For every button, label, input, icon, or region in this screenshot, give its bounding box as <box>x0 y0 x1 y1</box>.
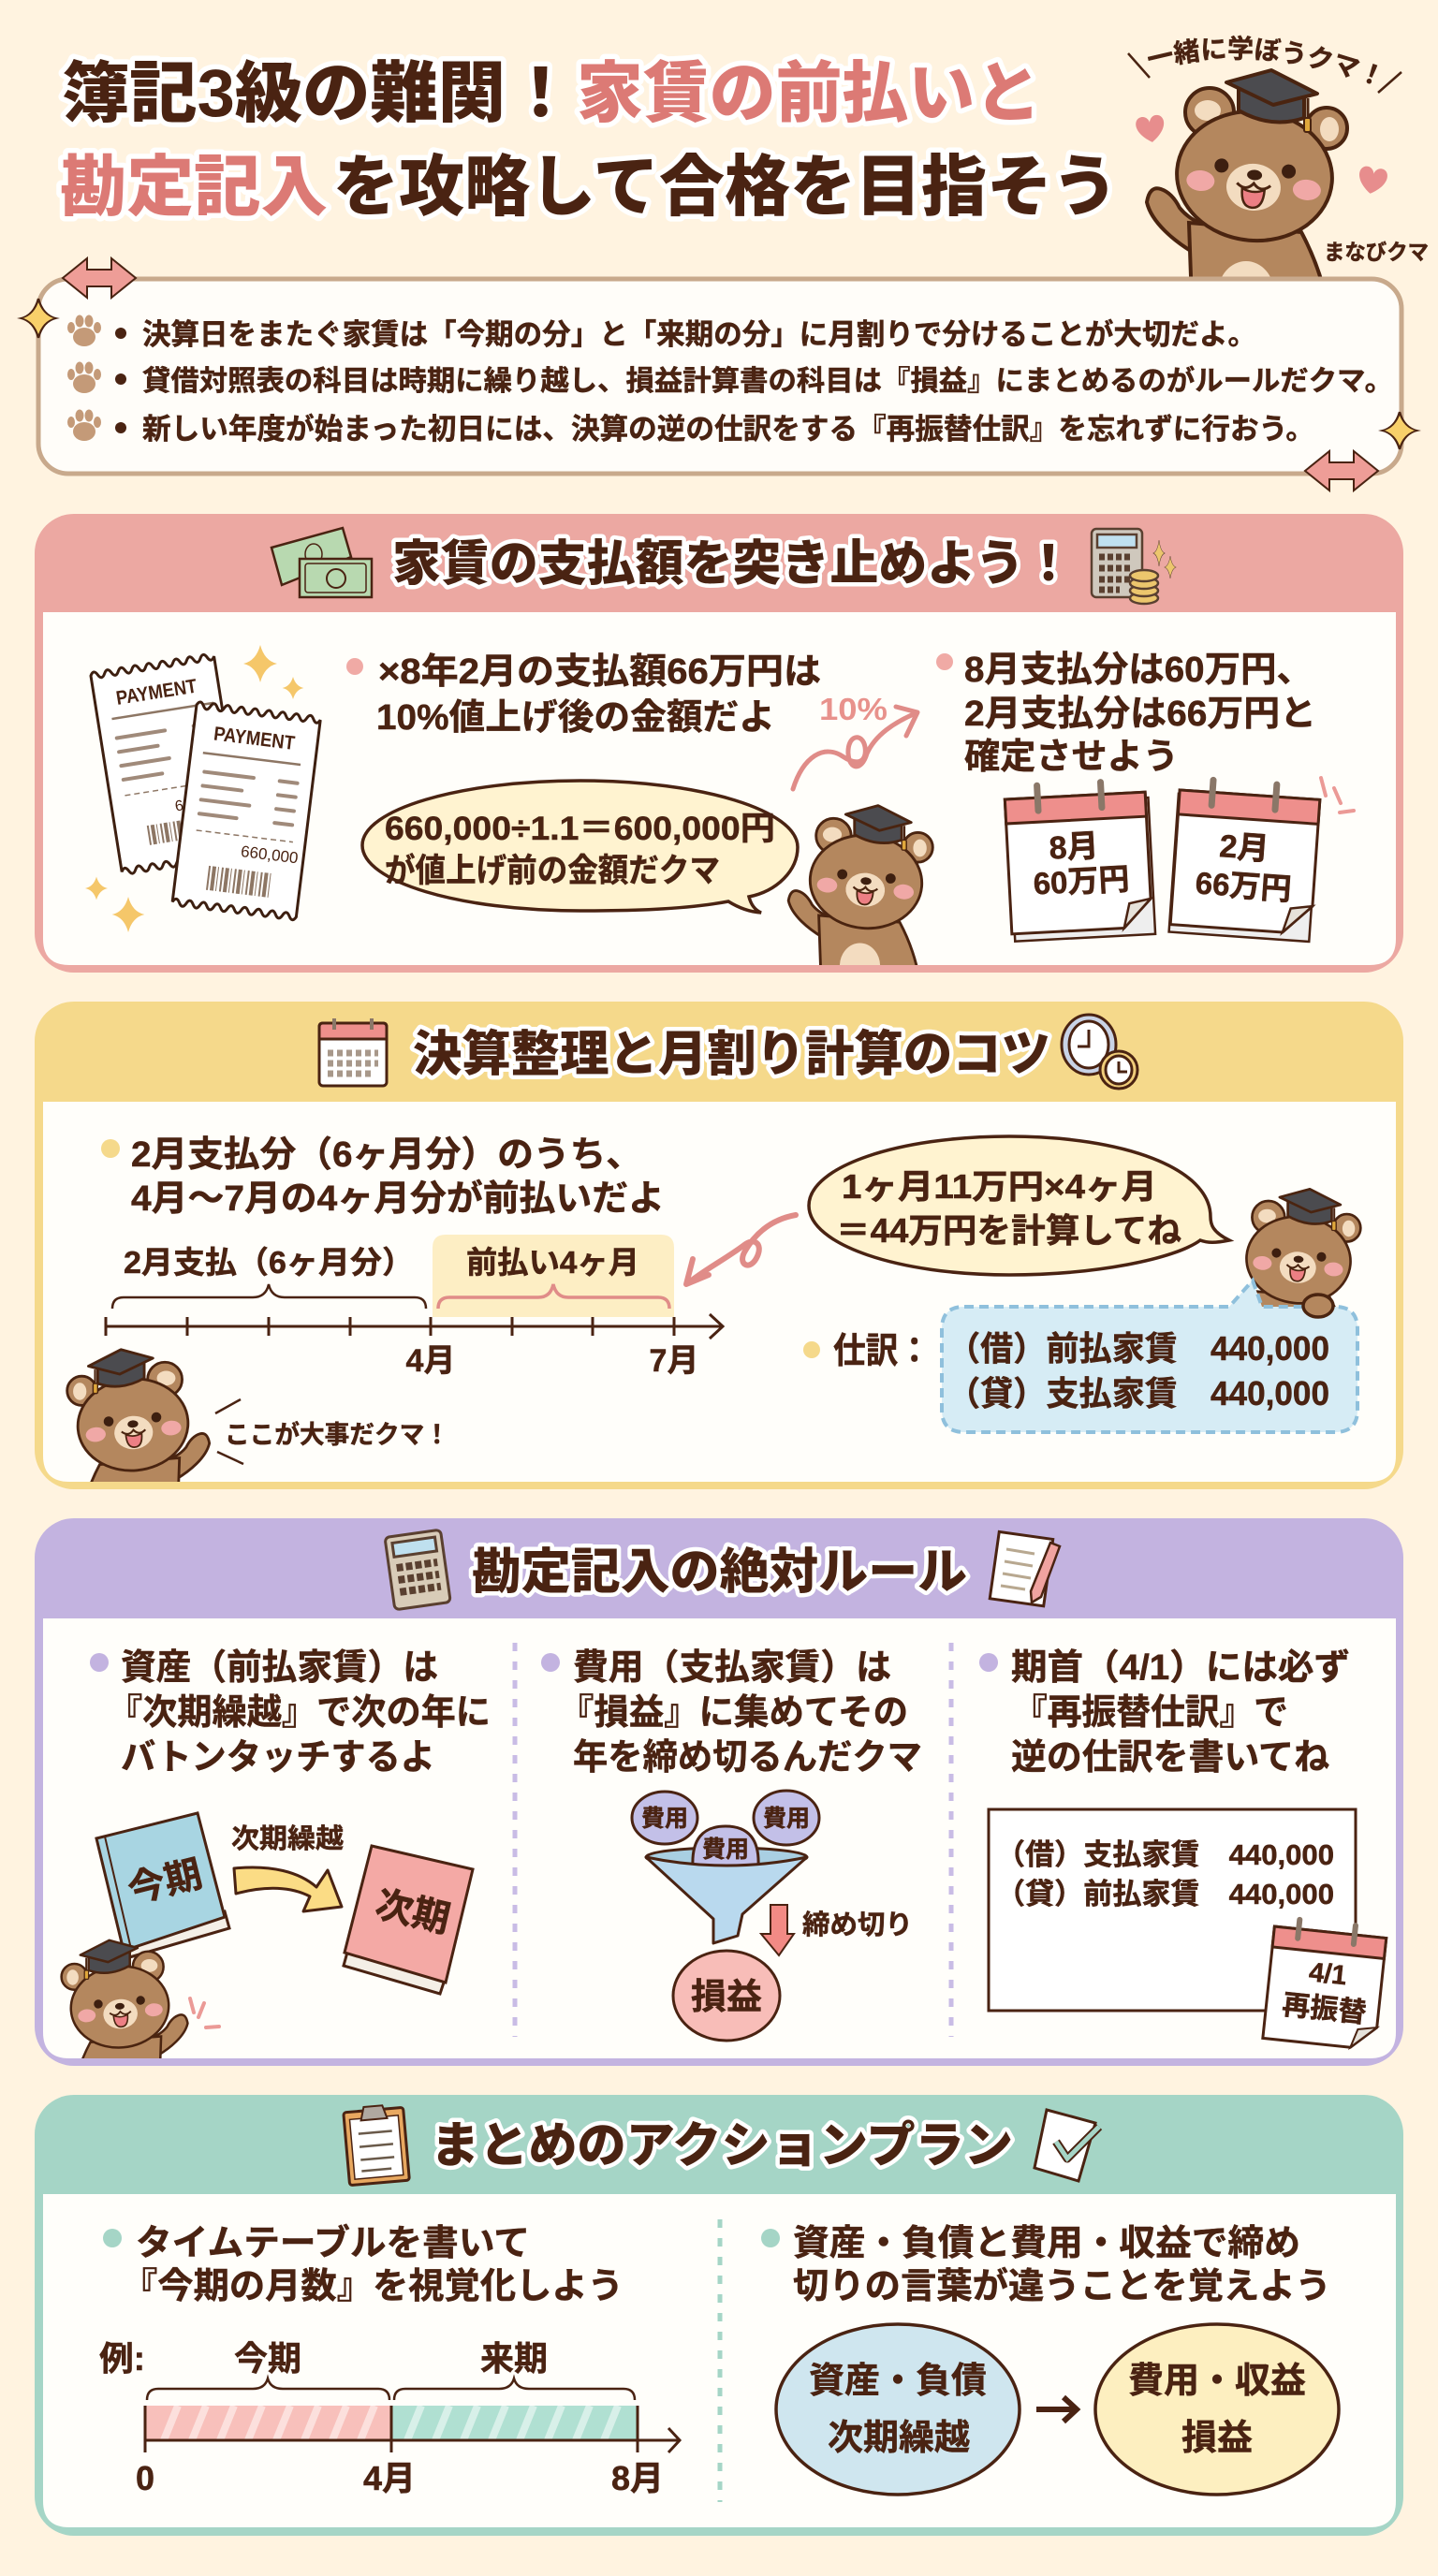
label 4月: 4月 <box>406 1343 455 1379</box>
left text <box>103 2223 624 2306</box>
label: 次期繰越: 次期繰越 <box>231 1823 344 1854</box>
label 8月: 8月 <box>611 2459 664 2497</box>
ball labels <box>641 1806 810 1863</box>
bear illustration <box>1147 70 1347 330</box>
label 今期: 今期 <box>234 2339 301 2378</box>
chart: example timeline <box>99 2339 680 2497</box>
bar 来期 <box>391 2406 638 2440</box>
panel: 決算整理 <box>35 1002 1403 1534</box>
bullet <box>101 1139 120 1158</box>
ball labels: 費用 <box>641 1806 688 1832</box>
calendar: 4/1 再振替: 4/1 <box>1308 1957 1348 1991</box>
point 3: 新しい年度が始まった初日には、決算の逆の仕訳をする『再振替仕訳』を忘れずに行おう。 <box>142 413 1314 446</box>
receipt front: 660,000 <box>240 842 299 867</box>
bullet <box>936 653 953 670</box>
icon: book 次期: 次期 <box>372 1884 454 1940</box>
text: ×8年2月 <box>376 652 821 738</box>
receipt back <box>90 653 245 875</box>
brace <box>112 1284 426 1309</box>
calendar: 2月 66万円: 2月 <box>1218 828 1270 868</box>
icon: calculator and coins <box>1092 529 1176 604</box>
bear paw <box>1303 1295 1333 1317</box>
panel: アクションプラン <box>35 2095 1403 2536</box>
ellipse: 費用・収益: 費用・収益 <box>1128 2362 1306 2401</box>
axis <box>106 1314 723 1339</box>
label 来期: 来期 <box>480 2339 548 2378</box>
icon: hearts <box>1135 114 1388 196</box>
column 1 text: 資産（前払家賃）は <box>121 1648 438 1688</box>
column 2 text: 『損益』に集めてその <box>559 1693 908 1733</box>
ellipse: 費用・収益 <box>1095 2324 1339 2495</box>
panel body <box>43 2194 1396 2527</box>
panel frame <box>35 514 1403 973</box>
ball <box>693 1826 758 1866</box>
bear <box>60 1939 189 2058</box>
point 2: 貸借対照表の科目は時期に繰り越し、損益計算書の科目は『損益』にまとめるのがルールだクマ。 <box>142 365 1393 397</box>
icon: clocks <box>1062 1015 1137 1089</box>
right text: 資産・負債と費用・収益で締め <box>793 2224 1300 2263</box>
text: 8月支払分: 確定させよう <box>964 738 1179 777</box>
title: 勘定記入 <box>60 151 328 225</box>
label 4月: 4月 <box>363 2459 416 2497</box>
ledger box <box>989 1809 1356 2011</box>
text: 2月支払分 <box>131 1135 665 1219</box>
icon: book 次期 <box>344 1846 473 1994</box>
arrow decorations <box>63 258 1378 490</box>
bar stripes <box>164 2406 618 2440</box>
speech: 一緒に学ぼうクマ: 一緒に学ぼうクマ！ <box>1148 36 1378 84</box>
ball labels: 費用 <box>702 1837 749 1863</box>
right text <box>761 2224 1331 2306</box>
calendar: 8月 60万円: 8月 <box>1049 828 1100 867</box>
axis <box>145 2406 680 2452</box>
panel body <box>43 612 1396 965</box>
icon: book 今期 <box>96 1813 229 1958</box>
note: ここが大事だクマ <box>215 1399 449 1464</box>
panel frame <box>38 279 1401 474</box>
speech bubble: 1ヶ月11万円: 1ヶ月11万円×4ヶ月 <box>842 1167 1157 1206</box>
journal entry box <box>942 1281 1357 1432</box>
funnel diagram <box>632 1791 913 2041</box>
sparkles <box>85 645 303 932</box>
calendar: 2月 66万円: 66万円 <box>1195 865 1293 906</box>
arrow: carry forward <box>234 1867 342 1911</box>
panel body <box>43 1102 1396 1482</box>
arrow down <box>761 1905 794 1955</box>
text: 8月支払分: 8月支払分は60万円、 <box>964 651 1313 690</box>
panel: 家賃の支払額 <box>35 514 1403 993</box>
icon: paws <box>67 315 101 441</box>
result circle <box>673 1951 780 2041</box>
bear right <box>1245 1188 1362 1307</box>
journal entry box: （貸）支払家賃 440,000 <box>947 1374 1329 1412</box>
illustration: receipts <box>90 653 321 920</box>
column 2 text: 年を締め切るんだクマ <box>573 1738 922 1778</box>
result circle: 損益 <box>691 1978 762 2017</box>
speech bubble: 1ヶ月11万円: ＝44万円を計算してね <box>836 1211 1181 1250</box>
column 3 text: 『再振替仕訳』で <box>1013 1693 1288 1733</box>
label: 10%: 10% <box>819 692 888 726</box>
text: ×8年2月: ×8年2月の支払額66万円は <box>378 652 821 692</box>
brace 来期 <box>394 2378 635 2400</box>
point 1: 決算日をまたぐ家賃は「今期の分」と「来期の分」に月割りで分けることが大切だよ。 <box>142 318 1256 351</box>
speech bubble: 660,000÷1.1 <box>362 781 798 913</box>
bullet <box>346 658 363 675</box>
panel frame <box>35 2095 1403 2536</box>
ellipse: 費用・収益: 損益 <box>1181 2419 1253 2458</box>
funnel <box>646 1857 807 1943</box>
panel: 勘定記入 <box>35 1518 1403 2104</box>
receipt back: 660,000 <box>174 791 230 815</box>
ledger box: （借）支払家賃 440,000 <box>996 1838 1334 1871</box>
label 例: 例: <box>99 2339 145 2378</box>
heading: 勘定記入の絶対ルール <box>472 1545 967 1600</box>
icon: book 今期: 今期 <box>124 1853 206 1911</box>
column 1 text: バトンタッチするよ <box>121 1738 435 1778</box>
calendar: 4/1 再振替 <box>1263 1917 1387 2050</box>
speech bubble: 660,000÷1.1: が値上げ前の金額だクマ <box>385 853 720 889</box>
emphasis marks <box>1321 778 1354 812</box>
icon: clipboard <box>343 2103 409 2186</box>
title: 簿記3級の難関 <box>62 57 506 131</box>
panel: key points <box>21 258 1417 490</box>
right text: 切りの言葉が違うことを覚えよう <box>793 2267 1331 2306</box>
bullet <box>803 1341 820 1358</box>
column 1 text: 『次期繰越』で次の年に <box>108 1693 491 1733</box>
divider right <box>949 1643 953 2037</box>
label 7月: 7月 <box>650 1343 698 1379</box>
ellipse: 資産・負債: 次期繰越 <box>828 2419 970 2458</box>
divider <box>717 2219 723 2502</box>
label 2月支払: 2月支払（6ヶ月分） <box>124 1245 414 1280</box>
column 3 text: 期首（4/1）には必ず <box>1011 1648 1350 1688</box>
left text: 『今期の月数』を視覚化しよう <box>122 2267 624 2306</box>
calendar: 4/1 再振替: 再振替 <box>1281 1989 1368 2029</box>
calendar: 8月 60万円 <box>1005 780 1155 942</box>
label: 締め切り: 締め切り <box>802 1910 913 1940</box>
ledger box: （貸）前払家賃 440,000 <box>996 1878 1334 1910</box>
icon: calculator <box>385 1530 450 1610</box>
text: 2月支払分: 4月～7月の4ヶ月分が前払いだよ <box>131 1179 665 1219</box>
receipt front: PAYMENT <box>213 724 296 754</box>
text: 8月支払分 <box>964 651 1316 777</box>
icon: notepad <box>990 1531 1060 1606</box>
title: 家賃の前払いと <box>577 57 1041 131</box>
arrow: 10% increase <box>793 707 917 789</box>
sparkle decorations <box>21 299 1417 449</box>
panel body <box>43 1618 1396 2058</box>
calendar: 8月 60万円: 60万円 <box>1033 861 1130 901</box>
speech bubble: 1ヶ月11万円 <box>809 1136 1229 1275</box>
text: 2月支払分: 2月支払分（6ヶ月分）のうち、 <box>131 1135 642 1175</box>
heading: 家賃の支払額を突き止めよう！ <box>392 537 1073 592</box>
bar 今期 <box>145 2406 391 2440</box>
journal entry box: （借）前払家賃 440,000 <box>947 1329 1329 1368</box>
arrow from bubble <box>686 1215 796 1284</box>
title <box>60 40 1118 225</box>
title: ！ <box>507 40 574 136</box>
text: 8月支払分: 2月支払分は66万円と <box>964 695 1316 734</box>
ball labels: 費用 <box>763 1806 810 1832</box>
icon: money <box>271 528 372 597</box>
bear name: まなびクマ <box>1324 240 1429 264</box>
receipt front <box>172 702 321 920</box>
label 前払い: 前払い4ヶ月 <box>466 1245 639 1280</box>
label 0: 0 <box>136 2459 154 2497</box>
divider left <box>513 1643 517 2037</box>
bear left <box>66 1348 212 1482</box>
bear <box>786 804 934 965</box>
heading: 決算整理と月割り計算のコツ <box>413 1028 1050 1082</box>
column 1 text <box>90 1648 491 1778</box>
text: ×8年2月: 10%値上げ後の金額だよ <box>376 698 775 738</box>
calendar: 2月 66万円 <box>1169 778 1321 942</box>
left text: タイムテーブルを書いて <box>136 2223 530 2263</box>
column 2 text <box>541 1648 922 1778</box>
highlight <box>433 1235 674 1317</box>
panel frame <box>35 1518 1403 2066</box>
arrow <box>1036 2397 1077 2422</box>
brace 今期 <box>147 2378 389 2400</box>
column 3 text: 逆の仕訳を書いてね <box>1011 1738 1329 1778</box>
balls <box>632 1791 819 1845</box>
panel frame <box>35 1002 1403 1489</box>
ellipse: 資産・負債 <box>776 2324 1020 2495</box>
label: 仕訳: 仕訳： <box>833 1332 931 1371</box>
ellipse: 資産・負債: 資産・負債 <box>809 2362 987 2401</box>
emphasis marks <box>190 1998 219 2027</box>
column 2 text: 費用（支払家賃）は <box>573 1648 891 1688</box>
heading: まとめのアクションプラン <box>431 2119 1013 2174</box>
icon: checked document <box>1034 2110 1099 2181</box>
note: ここが大事だクマ: ここが大事だクマ！ <box>225 1420 449 1449</box>
receipt back: PAYMENT <box>114 676 198 710</box>
title: を攻略して合格を目指そう <box>333 151 1118 225</box>
chart: timeline <box>106 1235 723 1379</box>
column 3 text <box>979 1648 1350 1778</box>
bullets <box>115 328 126 433</box>
brace prepaid <box>438 1284 669 1309</box>
mascot: top bear with speech <box>1127 36 1429 277</box>
funnel back <box>646 1848 807 1866</box>
speech bubble: 660,000÷1.1: 660,000÷1.1＝600,000円 <box>385 811 775 847</box>
icon: calendar <box>319 1018 387 1086</box>
